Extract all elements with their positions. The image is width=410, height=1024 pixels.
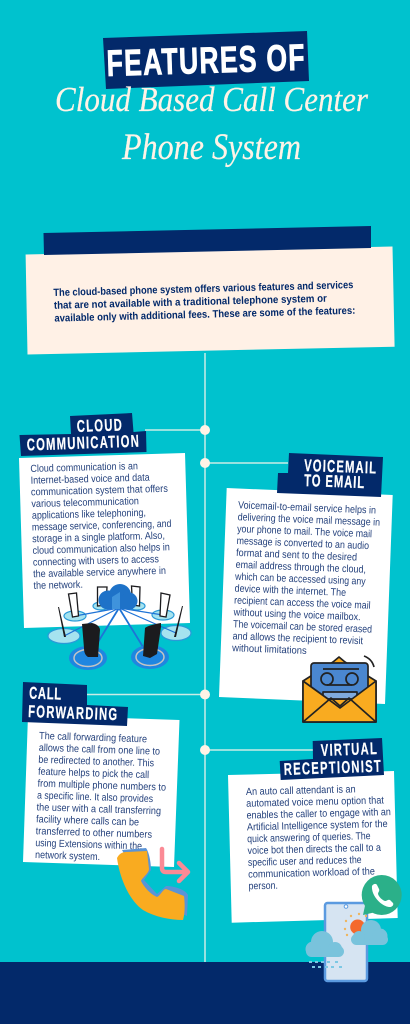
heading: voicemail to email [277, 453, 383, 497]
heading: call forwarding [22, 682, 128, 726]
body text: the available service anywhere in [33, 566, 166, 580]
body text: Internet-based voice and data [31, 473, 150, 487]
intro text: that are not available with a traditional telephone system or [54, 293, 327, 312]
card [23, 715, 180, 867]
body text: a specific line. It also provides [37, 791, 153, 805]
panel: call forwarding [22, 682, 188, 920]
body text: message is converted to an audio [236, 536, 369, 552]
body text: The voicemail can be stored erased [233, 619, 372, 636]
intro text [53, 279, 355, 325]
body text [246, 784, 391, 892]
intro text: The cloud-based phone system offers various features and services [53, 279, 354, 299]
heading: call forwarding: CALL [29, 684, 62, 704]
body text: without using the voice mailbox. [233, 607, 361, 623]
body text: the user with a call transferring [36, 802, 161, 817]
body text: voice bot then directs the call to a [247, 843, 381, 857]
body text: recipient can access the voice mail [234, 596, 371, 612]
body text: your phone to mail. The voice mail [237, 524, 372, 540]
panel: voicemail to email [219, 453, 393, 722]
body text: message service, conferencing, and [32, 519, 172, 533]
heading: virtual receptionist: RECEPTIONIST [284, 757, 381, 780]
body text: without limitations [231, 643, 307, 657]
body text: An auto call attendant is an [246, 784, 356, 798]
body text: communication workload of the [248, 867, 375, 881]
card [228, 771, 398, 923]
body text: enables the caller to engage with an [246, 807, 391, 822]
icon: phone with clouds and call bubble [306, 875, 402, 981]
bottom band [0, 962, 410, 1024]
body text: delivering the voice mail message in [237, 512, 380, 529]
body text: feature helps to pick the call [38, 767, 149, 781]
body text: and allows the recipient to revisit [232, 631, 363, 647]
body text: Voicemail-to-email service helps in [238, 500, 376, 517]
card [219, 488, 393, 704]
body text: storage in a single platform. Also, [32, 531, 165, 545]
heading: call forwarding: FORWARDING [28, 703, 117, 725]
body text: device with the internet. The [234, 584, 346, 599]
panel: cloud communication [19, 413, 191, 670]
body text: format and sent to the desired [236, 548, 357, 564]
body text: cloud communication also helps in [32, 542, 170, 557]
body text: transferred to other numbers [36, 826, 152, 841]
body text: allows the call from one line to [39, 743, 160, 758]
heading: voicemail to email: TO EMAIL [304, 472, 365, 493]
card [19, 453, 190, 628]
body text: person. [248, 881, 278, 892]
panel: intro [26, 226, 395, 354]
body text: which can be accessed using any [234, 572, 367, 588]
body text: the network. [33, 580, 83, 592]
timeline [87, 353, 313, 962]
title line: features of: FEATURES OF [106, 37, 305, 84]
intro header bar [44, 226, 371, 255]
heading: cloud communication [20, 413, 146, 456]
body text: The call forwarding feature [39, 731, 147, 745]
body text [35, 731, 166, 863]
body text: facility where calls can be [36, 814, 139, 829]
title banner [103, 31, 309, 89]
intro text: available only with additional fees. These are some of the features: [54, 305, 355, 325]
body text: automated voice menu option that [246, 795, 384, 810]
panel: virtual receptionist [228, 738, 402, 981]
body text: applications like telephoning, [32, 508, 146, 522]
icon: forwarded call [117, 848, 188, 920]
title line: phone system: Phone System [121, 127, 301, 168]
body text [231, 500, 380, 657]
body text [30, 461, 172, 592]
body text: various telecommunication [31, 496, 139, 510]
body text: email address through the cloud, [235, 560, 366, 576]
body text: from multiple phone numbers to [37, 779, 166, 794]
body text: be redirected to another. This [38, 755, 154, 769]
intro card [26, 246, 395, 354]
heading: cloud communication: CLOUD [77, 416, 122, 437]
body text: network system. [35, 850, 100, 863]
body text: specific user and reduces the [248, 855, 362, 869]
body text: communication system that offers [31, 484, 168, 498]
title line: cloud based call center: Cloud Based Call Center [55, 80, 368, 119]
body text: Cloud communication is an [30, 461, 138, 475]
icon: cloud network [48, 584, 191, 670]
title [55, 31, 368, 168]
icon: voicemail envelope [303, 656, 376, 722]
heading: virtual receptionist: VIRTUAL [321, 740, 377, 761]
heading: voicemail to email: VOICEMAIL [304, 457, 377, 478]
body text: connecting with users to access [33, 554, 159, 569]
body text: using Extensions within the [35, 838, 142, 852]
body text: Artificial Intelligence system for the [247, 819, 388, 833]
heading: virtual receptionist [280, 738, 384, 780]
body text: quick answering of queries. The [247, 831, 371, 845]
heading: cloud communication: COMMUNICATION [27, 432, 139, 455]
